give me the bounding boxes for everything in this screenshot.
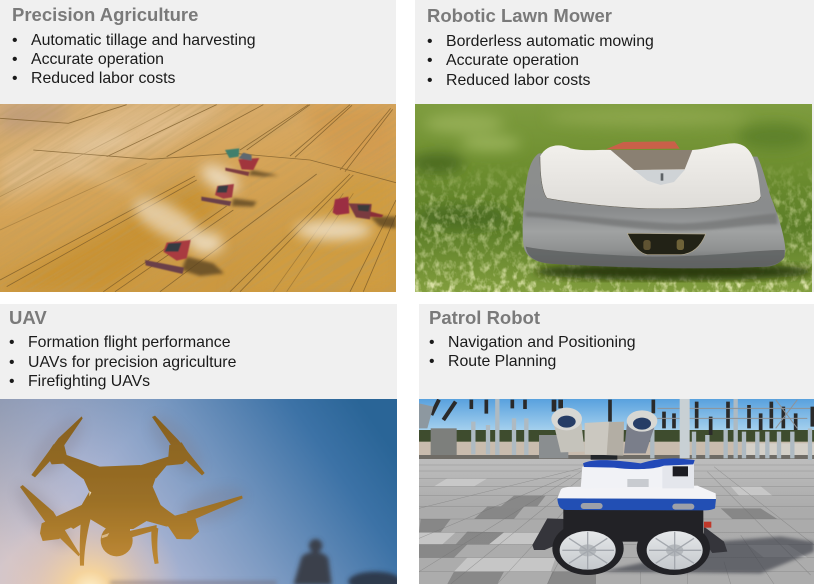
photo: combine harvesters in a wheat field — [0, 104, 785, 292]
bullet list: UAV — [10, 334, 236, 390]
drone body — [60, 465, 175, 529]
drone arm: lower right — [147, 505, 199, 539]
mower display window — [611, 150, 692, 170]
panel: Patrol Robot: Navigation and Positioning — [448, 334, 636, 351]
drone silhouette — [20, 416, 243, 566]
drone arm: lower left — [40, 505, 91, 541]
grass texture — [414, 160, 814, 293]
white upper body — [581, 463, 694, 488]
paving tone patches — [419, 496, 777, 584]
panel: Robotic Lawn Mower: Borderless automatic mowing — [446, 33, 654, 50]
patrol robot — [532, 408, 727, 575]
heading: Patrol Robot: Patrol Robot — [429, 307, 540, 328]
gimbal camera — [101, 524, 133, 556]
rear wheel — [552, 522, 624, 575]
photo: patrol robot at a substation — [34, 399, 814, 584]
drone arm: upper right — [139, 442, 191, 478]
propeller motion blur — [8, 407, 250, 553]
panel: Patrol Robot: Route Planning — [448, 353, 556, 370]
landing legs — [80, 518, 91, 566]
panel: Patrol Robot — [419, 304, 814, 584]
blue top cover — [583, 458, 695, 469]
paving tile grid — [419, 465, 814, 584]
blue bumper band — [557, 498, 716, 510]
harvester shadows — [182, 170, 396, 276]
panel: UAV: Firefighting UAVs — [28, 373, 150, 390]
mower red handle — [606, 141, 680, 149]
camera head — [591, 455, 617, 460]
panel: UAV: UAVs for precision agriculture — [28, 354, 236, 371]
heading: UAV: UAV — [9, 307, 47, 328]
field track lines — [0, 105, 396, 292]
propeller: lower left — [20, 485, 80, 556]
rear and front bumpers — [532, 518, 564, 550]
propeller: lower right — [187, 496, 243, 519]
panel: Precision Agriculture: Automatic tillage and harvesting — [31, 32, 256, 49]
dust clouds — [60, 129, 372, 254]
robot shadow — [601, 537, 814, 573]
panel: Precision Agriculture: Reduced labor costs — [31, 70, 175, 87]
substation poles and insulators — [431, 399, 812, 460]
panel: Robotic Lawn Mower — [415, 0, 814, 292]
photo: robotic lawn mower on grass — [415, 104, 812, 292]
drone arm: upper left — [47, 444, 102, 479]
substation equipment — [419, 403, 568, 458]
panel: Precision Agriculture — [0, 0, 396, 292]
silhouette: person on the horizon — [110, 539, 402, 584]
mower front sensor slot — [627, 233, 706, 255]
white lower body — [557, 486, 716, 499]
panel: UAV — [0, 304, 397, 584]
paving light tiles — [419, 478, 807, 572]
propeller: upper left — [31, 416, 83, 477]
bullet list: mower — [428, 33, 654, 89]
mower white top shell — [540, 143, 761, 209]
bullet list: agriculture — [12, 32, 256, 87]
panel: UAV: Formation flight performance — [28, 334, 231, 351]
mower — [523, 141, 785, 268]
front wheel — [637, 522, 710, 575]
panel: Robotic Lawn Mower: Reduced labor costs — [446, 72, 590, 89]
propeller: upper right — [152, 416, 205, 475]
combine harvesters — [145, 148, 383, 274]
chassis — [563, 508, 703, 542]
mower grey bumper body — [523, 153, 785, 268]
heading: Precision Agriculture: Precision Agriculture — [12, 4, 198, 25]
bullet list: patrol robot — [430, 334, 636, 370]
photo: drone silhouette at sunset — [0, 399, 672, 584]
panel: Robotic Lawn Mower: Accurate operation — [446, 52, 579, 69]
panel: Precision Agriculture: Accurate operation — [31, 51, 164, 68]
mower shadow — [534, 263, 814, 280]
heading: Robotic Lawn Mower: Robotic Lawn Mower — [427, 5, 612, 26]
